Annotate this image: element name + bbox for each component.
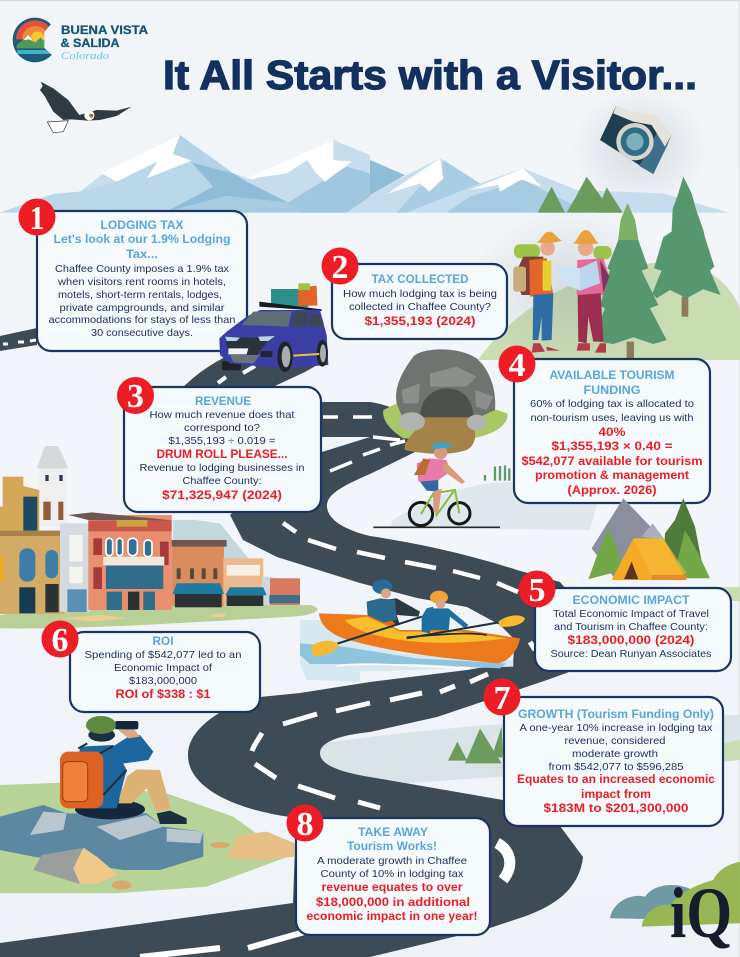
panel 5 body: $183,000,000 (2024) — [568, 635, 695, 647]
panel 6: ROI — [42, 620, 260, 712]
panel 8 body: A moderate growth in Chaffee — [317, 855, 467, 867]
panel 3 heading: REVENUE — [195, 396, 251, 408]
illustration: downtown buildings — [0, 446, 318, 629]
panel 4 figures: 40% — [598, 427, 626, 439]
mountains — [0, 135, 728, 213]
icon: small pines between road bands — [448, 727, 503, 763]
badge 2: 2 — [332, 249, 348, 286]
panel 7 heading: GROWTH (Tourism Funding Only) — [518, 709, 714, 721]
icon: bald eagle — [40, 82, 132, 133]
icon: large pine trees — [593, 177, 721, 358]
panel 3 body: correspond to? — [184, 422, 260, 434]
panel 8 heading: TAKE AWAY — [358, 827, 428, 839]
panel 7 body: from $542,077 to $596,285 — [548, 761, 684, 773]
panel 3 body: Revenue to lodging businesses in — [140, 462, 305, 474]
logo: Buena Vista & Salida Colorado — [13, 18, 148, 62]
panel 4 body: non-tourism uses, leaving us with — [530, 412, 694, 424]
panel 8 figures: economic impact in one year! — [306, 911, 478, 923]
panel 3: revenue — [117, 377, 321, 512]
panel 1 body — [48, 263, 236, 339]
badge 2 — [322, 248, 358, 286]
panel 8 heading: Tourism Works! — [347, 841, 437, 853]
panel 8 body — [317, 855, 467, 880]
logo: Buena Vista & Salida Colorado: BUENA VISTA — [61, 23, 148, 37]
panel 3 body: How much revenue does that — [150, 409, 295, 421]
panel 7 body: revenue, considered — [564, 735, 666, 747]
logo: Buena Vista & Salida Colorado: & SALIDA — [60, 36, 120, 50]
panel 8 heading — [347, 827, 437, 853]
panel 7 body — [520, 722, 713, 773]
panel 4: available tourism funding — [498, 346, 710, 503]
badge 1: 1 — [30, 200, 44, 237]
illustration: two hikers with a map — [513, 230, 612, 353]
title: It All Starts with a Visitor... — [163, 52, 697, 98]
badge 8 — [286, 804, 324, 843]
panel 3 body: Chaffee County: — [182, 475, 262, 487]
panel 4 body — [530, 398, 694, 424]
panel 8: take away — [286, 804, 490, 935]
panel 6 body — [84, 649, 242, 687]
panel 1 body: when visitors rent rooms in hotels, — [57, 276, 226, 288]
panel 6 body: Spending of $542,077 led to an — [84, 649, 242, 661]
badge 8: 8 — [296, 806, 314, 843]
panel 1 body: motels, short-term rentals, lodges, — [58, 289, 222, 301]
water under kayak — [300, 620, 513, 682]
green hills — [310, 205, 740, 790]
panel 7 figures: $183M to $201,300,000 — [544, 803, 688, 815]
panel 8 figures: $18,000,000 in additional — [316, 897, 470, 909]
panel 7 body: moderate growth — [572, 748, 658, 760]
panel 7 body: A one-year 10% increase in lodging tax — [520, 722, 713, 734]
panel 3 body: DRUM ROLL PLEASE... — [156, 449, 288, 461]
panel 1 heading — [54, 220, 230, 261]
badge 3 — [117, 377, 154, 415]
panel 7: growth — [484, 678, 723, 826]
badge 5: 5 — [528, 572, 546, 609]
illustration: hiker with binoculars on a rock — [0, 716, 295, 893]
panel 8 body: County of 10% in lodging tax — [320, 868, 464, 880]
panel 5 body: Source: Dean Runyan Associates — [550, 648, 712, 660]
illustration: cave — [383, 349, 508, 454]
panel 8 figures: revenue equates to over — [322, 882, 463, 894]
panel 2 body — [343, 288, 497, 313]
panel 1 heading: LODGING TAX — [100, 220, 184, 232]
panel 5 heading: ECONOMIC IMPACT — [572, 595, 690, 607]
panel 4 figures: $1,355,193 × 0.40 = — [552, 441, 673, 453]
bushes bottom right — [610, 862, 740, 927]
panel 4 figures: $542,077 available for tourism — [522, 456, 702, 468]
panel 5: economic impact — [518, 570, 731, 671]
badge 6 — [42, 620, 78, 659]
icon: blue car with luggage — [219, 283, 328, 372]
illustration: tent and trees — [588, 498, 710, 580]
panel 1 heading: Tax... — [126, 249, 158, 261]
panel 5 body — [550, 608, 712, 660]
badge 3: 3 — [127, 378, 144, 415]
panel 5 body: and Tourism in Chaffee County: — [554, 621, 708, 633]
panel 3 body: $1,355,193 ÷ 0.019 = — [168, 435, 276, 447]
panel 6 figure: ROI of $338 : $1 — [116, 689, 211, 701]
illustration: cyclist — [373, 442, 509, 527]
panel 2 body: How much lodging tax is being — [343, 288, 497, 300]
panel 5 body: Total Economic Impact of Travel — [553, 608, 709, 620]
panel 1 body: private campgrounds, and similar — [60, 302, 225, 314]
icon: small pine trees on the horizon — [538, 177, 623, 213]
panel 7 figures: impact from — [581, 789, 651, 801]
panel 4 heading: AVAILABLE TOURISM — [550, 370, 674, 382]
panel 4 figures: promotion & management — [535, 470, 689, 482]
panel 1 heading: Let's look at our 1.9% Lodging — [54, 234, 230, 246]
panel 1 body: Chaffee County imposes a 1.9% tax — [55, 263, 230, 275]
panel 4 heading: FUNDING — [584, 385, 641, 397]
panel 2 heading: TAX COLLECTED — [372, 274, 468, 286]
winding road — [0, 328, 610, 957]
panel 3 figure: $71,325,947 (2024) — [162, 490, 282, 502]
panel 1 body: 30 consecutive days. — [91, 327, 193, 339]
panel 2 figure: $1,355,193 (2024) — [364, 316, 476, 328]
badge 4 — [498, 346, 536, 384]
panel 4 heading — [550, 370, 674, 397]
panel 8 figures — [306, 882, 478, 923]
badge 7 — [484, 678, 520, 717]
panel 7 figures: Equates to an increased economic — [517, 774, 716, 786]
badge 4: 4 — [508, 347, 526, 384]
badge 6: 6 — [52, 622, 68, 659]
badge 1 — [18, 198, 56, 237]
panel 7 figures — [517, 774, 716, 815]
panel 4 body: 60% of lodging tax is allocated to — [530, 398, 694, 410]
panel 4 figures — [522, 427, 702, 497]
panel 2 body: collected in Chaffee County? — [349, 301, 491, 313]
panel 1: lodging tax — [18, 198, 247, 351]
panel 6 heading: ROI — [152, 636, 174, 648]
panel 2: tax collected — [322, 248, 507, 339]
badge 5 — [518, 570, 556, 609]
panel 6 body: Economic Impact of — [114, 662, 212, 674]
panel 4 figures: (Approx. 2026) — [568, 485, 657, 497]
panel 3 body — [140, 409, 305, 487]
icon: camera — [570, 88, 710, 208]
panel 6 body: $183,000,000 — [129, 675, 197, 687]
badge 7: 7 — [494, 680, 510, 717]
illustration: kayak with two paddlers — [311, 579, 525, 663]
logo: Buena Vista & Salida Colorado: Colorado — [61, 51, 109, 62]
panel 1 body: accommodations for stays of less than — [48, 314, 236, 326]
